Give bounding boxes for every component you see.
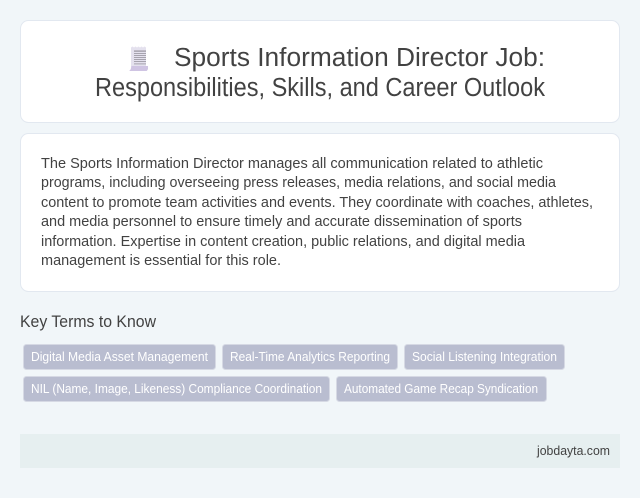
tag: social listening integration: Social Listening Integration (412, 350, 557, 364)
description text: information. Expertise in content creation, public relations, and digital media (41, 233, 526, 250)
icon: document scroll (129, 46, 148, 71)
tag: real-time analytics reporting: Real-Time Analytics Reporting (230, 350, 390, 364)
description text: and media personnel to ensure timely and accurate dissemination of sports (41, 213, 522, 230)
description text: programs, including overseeing press releases, media relations, and social media (41, 174, 557, 191)
heading: key terms: Key Terms to Know (20, 313, 156, 331)
tag: social listening integration (404, 344, 564, 370)
tag: digital media asset management: Digital Media Asset Management (31, 350, 209, 364)
tags: key terms (24, 344, 564, 402)
description text: management is essential for this role. (41, 252, 281, 269)
footer bar (20, 434, 620, 468)
title text (95, 44, 545, 102)
title text: Responsibilities, Skills, and Career Outlook (95, 74, 545, 102)
tag: automated game recap syndication (336, 376, 546, 402)
tag: nil compliance coordination (24, 376, 330, 402)
tag: nil compliance coordination: NIL (Name, Image, Likeness) Compliance Coordination (31, 382, 322, 396)
description text (41, 155, 593, 269)
tag: real-time analytics reporting (222, 344, 398, 370)
footer text: jobdayta.com (536, 444, 610, 458)
title text: Sports Information Director Job: (174, 44, 545, 72)
panel: title card (20, 20, 620, 122)
description text: content to promote team activities and events. They coordinate with coaches, athletes, (41, 194, 593, 211)
panel: description card (20, 134, 620, 292)
tag: digital media asset management (24, 344, 216, 370)
description text: The Sports Information Director manages all communication related to athletic (41, 155, 543, 172)
tag: automated game recap syndication: Automated Game Recap Syndication (344, 382, 538, 396)
